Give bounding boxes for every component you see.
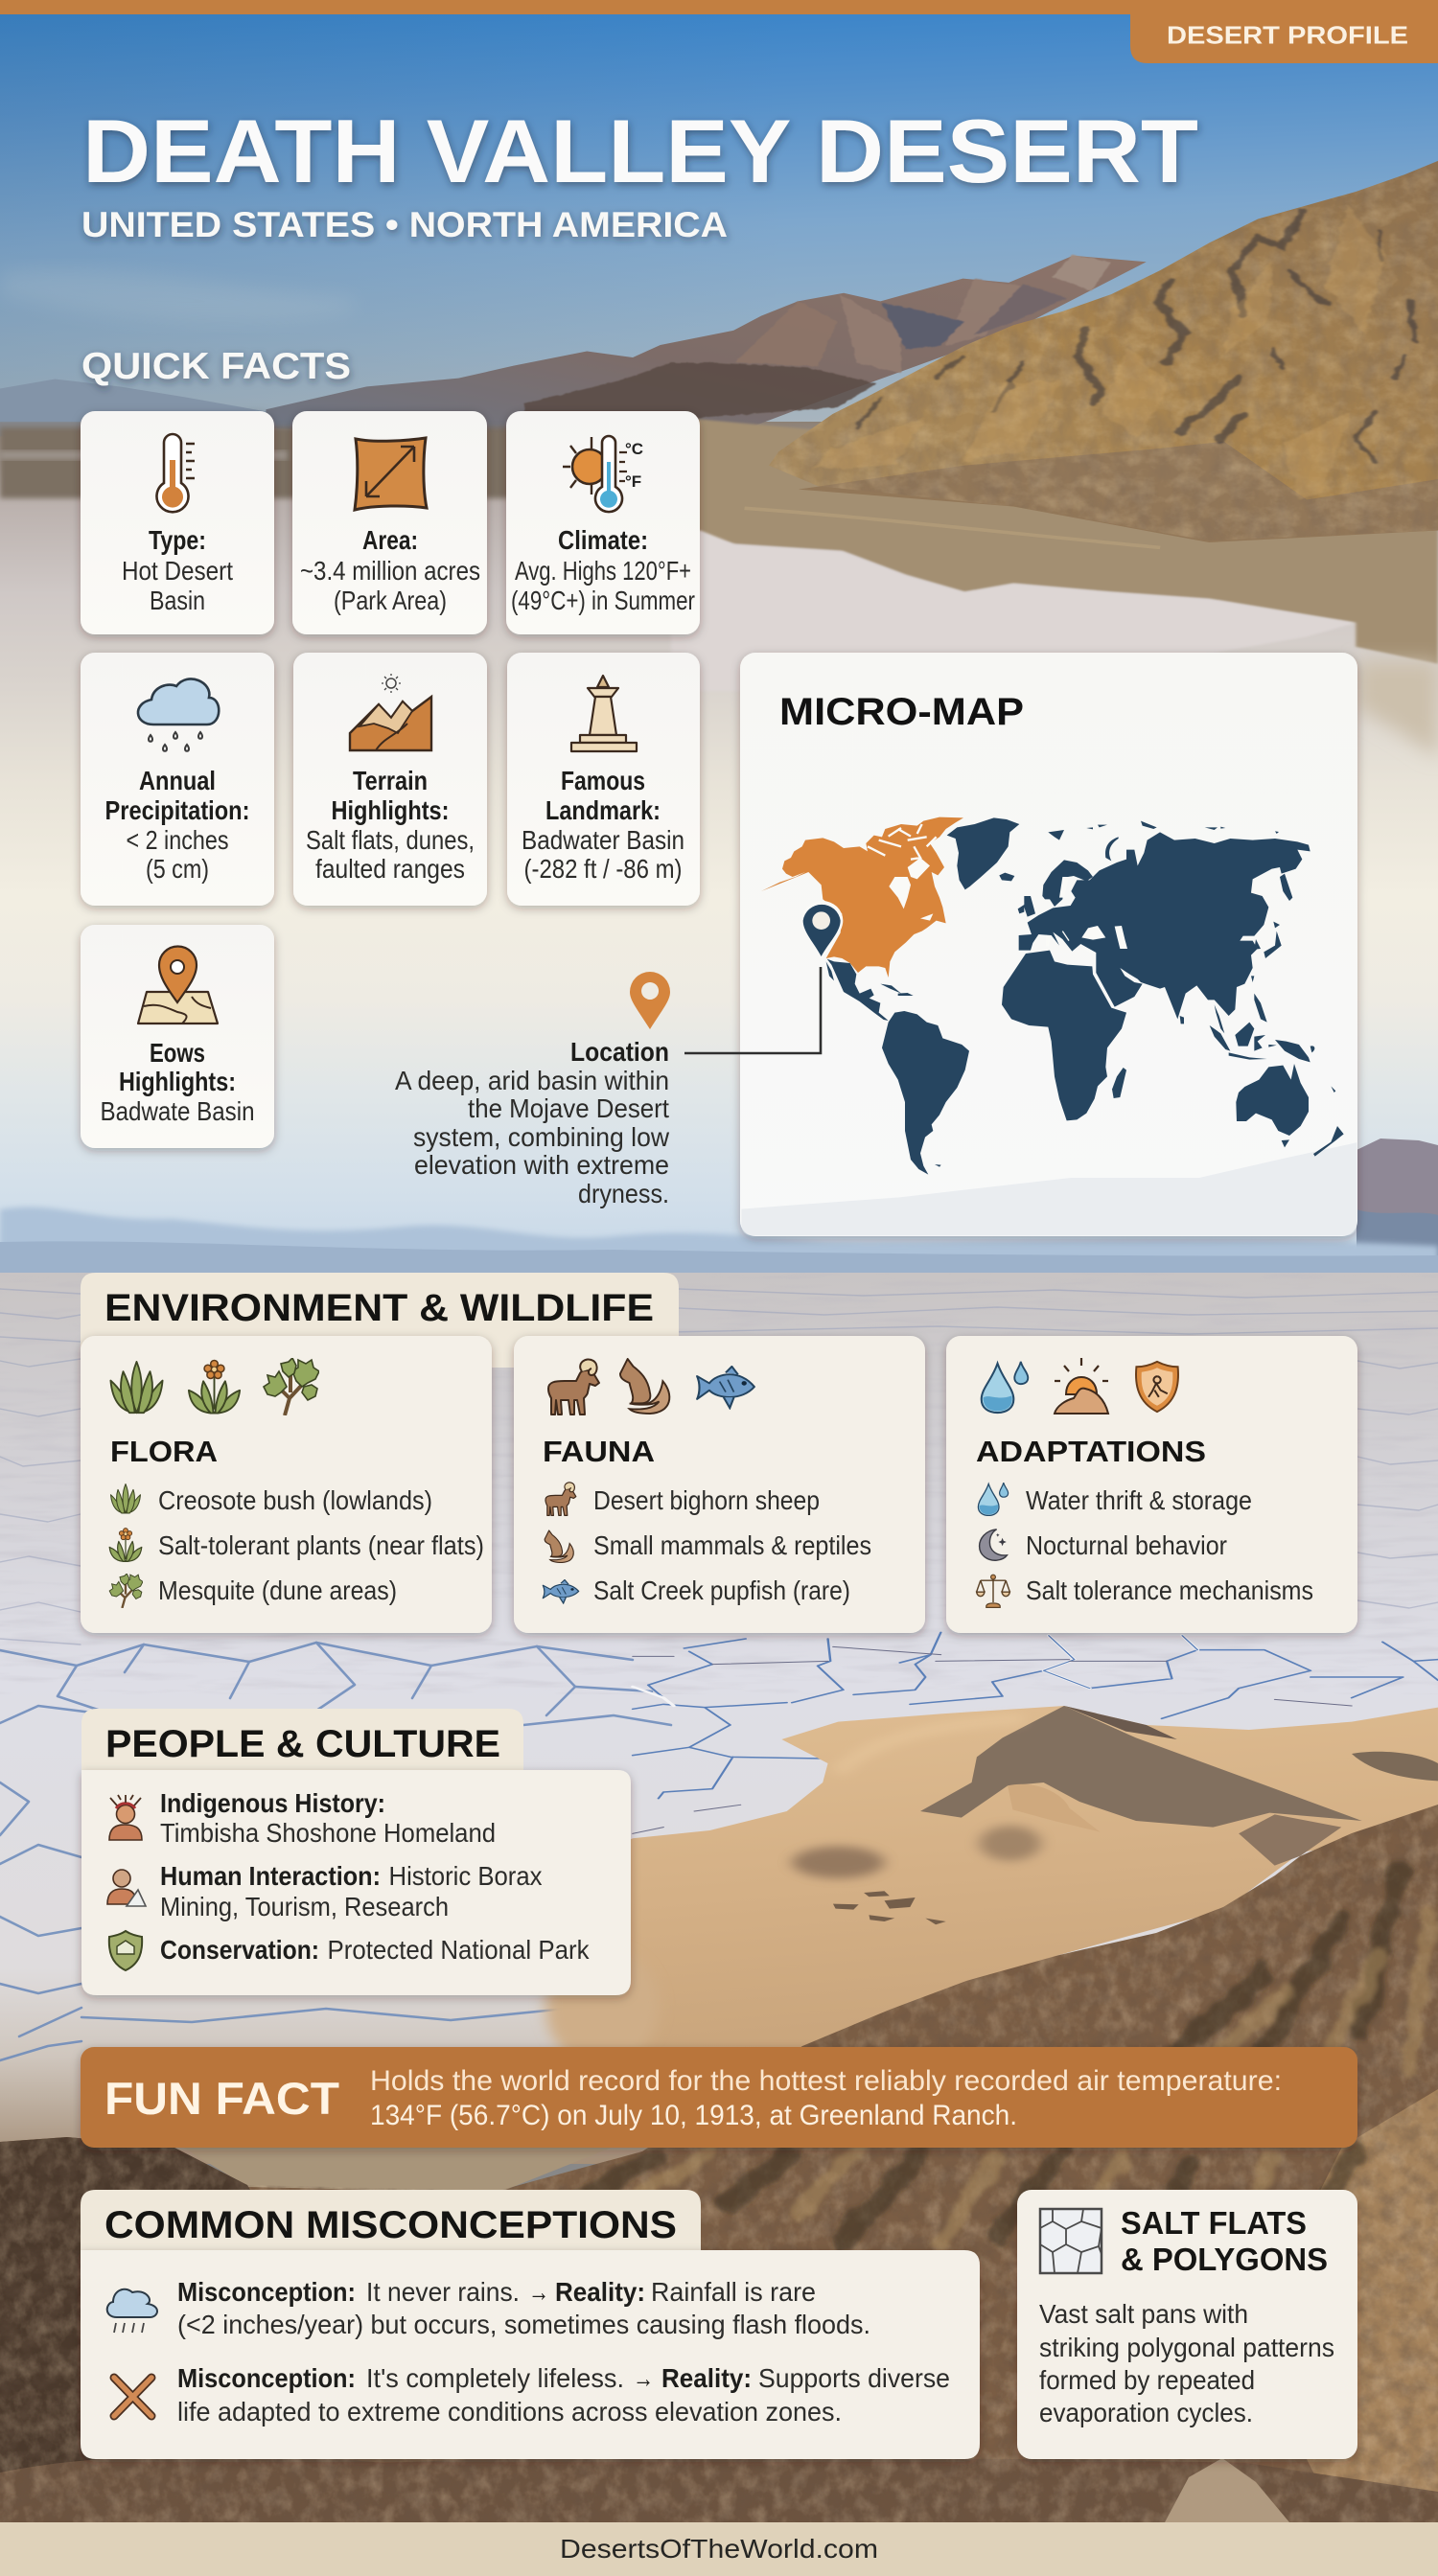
salt polygons [0, 1289, 1438, 2060]
icon: terrain mountains [350, 674, 431, 750]
text: highlights [100, 1038, 255, 1126]
heading: fauna: FAUNA [543, 1435, 655, 1468]
text: misconception two: Reality: [661, 2363, 752, 2393]
text: precipitation: Annual [139, 766, 216, 795]
text: indigenous history: Timbisha Shoshone Homeland [160, 1818, 496, 1848]
badge: desert profile [1130, 14, 1438, 63]
panel: adaptations [946, 1336, 1357, 1633]
text: human interaction: Mining, Tourism, Research [160, 1892, 449, 1921]
adaptation icons [982, 1358, 1178, 1414]
heading tab: people and culture: PEOPLE & CULTURE [105, 1723, 500, 1765]
icon: person with mountain [107, 1870, 146, 1906]
fauna list: Desert bighorn sheep [593, 1485, 820, 1515]
heading tab: environment and wildlife: ENVIRONMENT & WILDLIFE [104, 1287, 654, 1329]
text: highlights: Badwate Basin [100, 1096, 255, 1126]
text: human interaction: Human Interaction: [160, 1861, 381, 1891]
text: misconception one: (<2 inches/year) but occurs, sometimes causing flash floods. [177, 2310, 870, 2339]
text: misconception two: life adapted to extreme conditions across elevation zones. [177, 2397, 842, 2426]
text: fun fact body [370, 2065, 1282, 2131]
heading tab: environment and wildlife [81, 1273, 679, 1368]
text: landmark [522, 766, 684, 884]
text: indigenous history: Indigenous History: [160, 1788, 385, 1818]
icon: sun and thermometer [563, 436, 643, 512]
text: precipitation: (5 cm) [146, 854, 209, 884]
icon: polygon pattern [1040, 2209, 1102, 2273]
panel: precipitation card [81, 653, 274, 906]
title: DEATH VALLEY DESERT [82, 101, 1198, 201]
text: misconception one: Rainfall is rare [651, 2277, 816, 2307]
text: salt flats description: Vast salt pans with [1039, 2299, 1248, 2329]
heading tab: common misconceptions: COMMON MISCONCEPTIONS [104, 2204, 677, 2246]
back range facets [524, 255, 1111, 418]
icon: sun and thermometer: °C [625, 440, 643, 458]
text: salt flats description: striking polygonal patterns [1039, 2333, 1334, 2362]
text: misconception one: Reality: [555, 2277, 645, 2307]
text: conservation: Protected National Park [328, 1935, 590, 1965]
panel: area card [292, 411, 487, 634]
text: fun fact body: Holds the world record for the hottest reliably recorded air temperature: [370, 2065, 1282, 2097]
panel: climate card [506, 411, 700, 634]
big mountain [769, 161, 1438, 540]
adaptations list: Nocturnal behavior [1026, 1530, 1227, 1560]
icon: conservation shield [109, 1931, 142, 1970]
heading: fun fact: FUN FACT [104, 2073, 339, 2124]
text: misconception one: It never rains. [366, 2277, 520, 2307]
heading: salt flats and polygons: SALT FLATS [1121, 2205, 1307, 2241]
text: area: ~3.4 million acres [300, 556, 480, 586]
text: climate: Climate: [558, 525, 648, 555]
text: human interaction [160, 1861, 543, 1921]
text: landmark: Badwater Basin [522, 825, 684, 855]
fauna icons [548, 1359, 754, 1414]
section: people and culture [81, 1709, 631, 1995]
footer [0, 2522, 1438, 2576]
icon: rain cloud [107, 2289, 157, 2333]
heading: salt flats and polygons [1121, 2205, 1328, 2277]
text: landmark: Famous [561, 766, 645, 795]
panel: fauna [514, 1336, 925, 1633]
heading: quick facts: QUICK FACTS [81, 346, 351, 387]
text: climate [511, 525, 695, 615]
text: area [300, 525, 480, 615]
flora icons [110, 1358, 319, 1415]
text: misconception two: It's completely lifeless. [366, 2363, 624, 2393]
panel: misconceptions list [81, 2250, 980, 2459]
text: precipitation [105, 766, 249, 884]
text: salt flats description: formed by repeated [1039, 2365, 1255, 2395]
text: highlights: Eows [150, 1038, 205, 1068]
heading: salt flats and polygons: & POLYGONS [1121, 2242, 1328, 2277]
section: environment and wildlife [81, 1273, 1357, 1633]
panel: people list [81, 1770, 631, 1995]
panel: type card [81, 411, 274, 634]
shoreline band [0, 427, 729, 498]
text: precipitation: < 2 inches [127, 825, 228, 855]
text: location description [395, 1037, 670, 1208]
heading: micro-map: MICRO-MAP [779, 691, 1024, 733]
heading: flora: FLORA [110, 1435, 218, 1468]
text: misconception one: Misconception: [177, 2277, 356, 2307]
text: terrain [306, 766, 475, 884]
fauna list: Small mammals & reptiles [593, 1530, 871, 1560]
text: landmark: (-282 ft / -86 m) [523, 854, 683, 884]
flora list: Salt-tolerant plants (near flats) [158, 1530, 484, 1560]
heading: adaptations: ADAPTATIONS [976, 1435, 1206, 1468]
fauna list: Salt Creek pupfish (rare) [593, 1576, 850, 1605]
callout: fun fact [81, 2047, 1357, 2148]
footer: DesertsOfTheWorld.com [560, 2534, 878, 2564]
text: misconception two: → [633, 2363, 654, 2393]
text: indigenous history [160, 1788, 496, 1848]
text: type [122, 525, 233, 615]
text: type: Hot Desert [122, 556, 233, 586]
text: climate: (49°C+) in Summer [511, 586, 695, 615]
text: location description: A deep, arid basin within [395, 1066, 669, 1095]
section: common misconceptions [81, 2190, 980, 2459]
sand dunes [545, 1706, 1438, 2067]
text: climate: Avg. Highs 120°F+ [515, 556, 691, 586]
icon: location pin [630, 972, 670, 1029]
text: location description: system, combining low [413, 1122, 670, 1152]
text: salt flats description: evaporation cycles. [1039, 2398, 1253, 2427]
text: salt flats description [1039, 2299, 1334, 2427]
heading tab: common misconceptions [81, 2190, 701, 2262]
icon: map with pin [138, 947, 218, 1024]
text: misconception two: Supports diverse [758, 2363, 950, 2393]
panel: terrain card [293, 653, 487, 906]
icon: cross mark [114, 2378, 151, 2416]
text: highlights: Highlights: [119, 1067, 236, 1096]
text: location description: Location [570, 1037, 669, 1067]
panel: highlights card [81, 925, 274, 1148]
text: misconception one: → [528, 2277, 549, 2307]
flora list: Mesquite (dune areas) [158, 1576, 397, 1605]
icon: indigenous figure [109, 1795, 142, 1840]
connector line to map pin [684, 967, 821, 1053]
text: terrain: Terrain [353, 766, 428, 795]
text: area: (Park Area) [334, 586, 447, 615]
panel: micro-map [740, 653, 1357, 1236]
top accent bar [0, 0, 1438, 14]
text: fun fact body: 134°F (56.7°C) on July 10, 1913, at Greenland Ranch. [370, 2100, 1017, 2131]
world map [761, 817, 1344, 1175]
panel: salt flats and polygons [1017, 2190, 1357, 2459]
text: landmark: Landmark: [545, 795, 661, 825]
heading tab: people and culture [81, 1709, 523, 1782]
icon: landmark tower [571, 676, 637, 751]
text: conservation [160, 1935, 590, 1965]
subtitle: UNITED STATES • NORTH AMERICA [81, 205, 728, 244]
text: terrain: faulted ranges [315, 854, 465, 884]
text: human interaction: Historic Borax [389, 1861, 543, 1891]
panel: flora [81, 1336, 492, 1633]
text: type: Type: [149, 525, 206, 555]
text: type: Basin [150, 586, 205, 615]
icon: area square [355, 438, 427, 510]
adaptations list: Water thrift & storage [1026, 1485, 1252, 1515]
text: conservation: Conservation: [160, 1935, 319, 1965]
text: area: Area: [362, 525, 418, 555]
text: misconception two: Misconception: [177, 2363, 356, 2393]
text: location description: elevation with extreme [414, 1150, 669, 1180]
fauna list [543, 1483, 871, 1605]
text: terrain: Highlights: [332, 795, 449, 825]
text: misconception two [177, 2363, 950, 2426]
text: location description: dryness. [578, 1179, 669, 1208]
lower mountains [0, 1805, 1438, 2522]
panel: landmark card [507, 653, 700, 906]
icon: map pin [801, 901, 843, 959]
icon: rain cloud [138, 678, 219, 751]
text: precipitation: Precipitation: [105, 795, 249, 825]
text: location description: the Mojave Desert [468, 1093, 669, 1123]
icon: sun and thermometer: °F [625, 472, 641, 491]
icon: thermometer [157, 434, 195, 512]
flora list: Creosote bush (lowlands) [158, 1485, 432, 1515]
tan plain [641, 414, 1438, 664]
adaptations list: Salt tolerance mechanisms [1026, 1576, 1313, 1605]
text: terrain: Salt flats, dunes, [306, 825, 475, 855]
text: misconception one [177, 2277, 870, 2339]
badge: desert profile: DESERT PROFILE [1167, 21, 1408, 50]
flora list [109, 1484, 484, 1608]
adaptations list [977, 1483, 1313, 1607]
